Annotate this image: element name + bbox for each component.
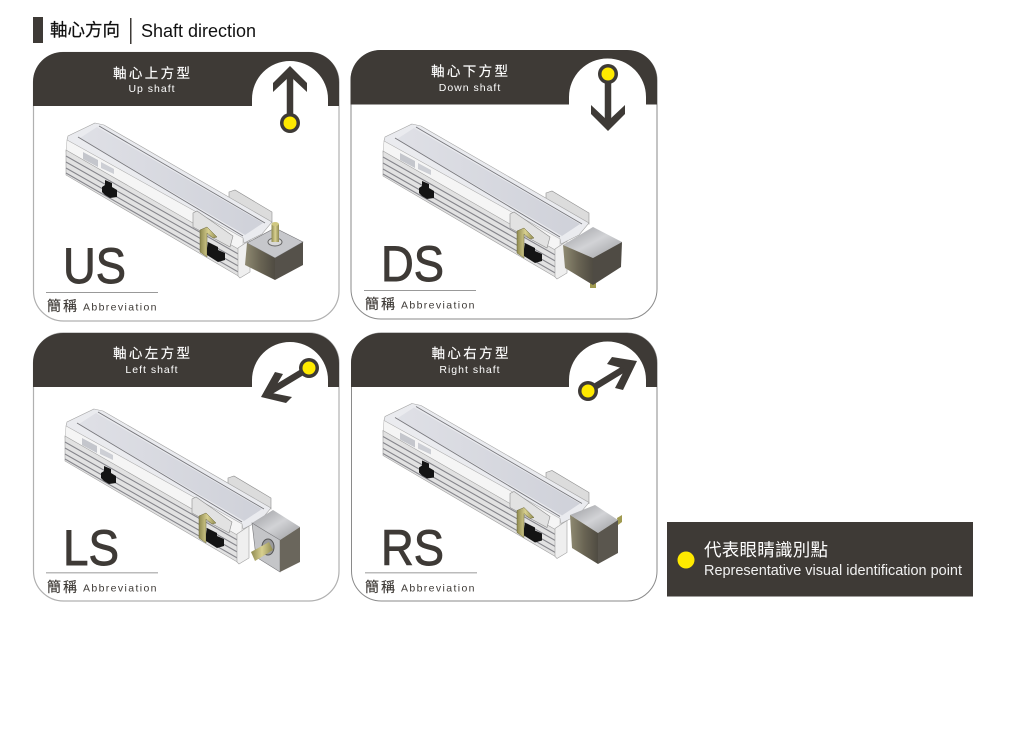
header text — [432, 346, 508, 376]
abbreviation: RS: 簡稱 — [365, 579, 395, 595]
panel: Right shaft — [351, 333, 657, 601]
heading English: Shaft direction — [141, 21, 256, 41]
panel: Down shaft — [350, 50, 657, 319]
header text: 軸心左方型 — [113, 346, 190, 361]
panel: Up shaft — [33, 52, 339, 321]
icon: up arrow with yellow point — [273, 66, 307, 133]
legend: visual identification point — [667, 522, 973, 596]
abbreviation: DS: Abbreviation — [401, 300, 475, 312]
abbreviation: LS: 簡稱 — [47, 579, 77, 595]
panel header — [350, 50, 657, 104]
icon: yellow point — [678, 552, 694, 568]
actuator with downward motor shaft — [383, 124, 622, 288]
panel header — [351, 333, 657, 387]
abbreviation: LS: Abbreviation — [83, 582, 157, 594]
panel: Left shaft — [33, 333, 339, 601]
header text: 軸心下方型 — [431, 64, 508, 79]
heading marker — [33, 17, 43, 43]
abbreviation: RS: Abbreviation — [401, 582, 475, 594]
legend Chinese label: 代表眼睛識別點 — [704, 540, 828, 560]
actuator with rightward motor shaft — [383, 404, 622, 564]
legend English label: Representative visual identification point — [704, 563, 962, 579]
abbreviation: US: US — [63, 238, 126, 294]
header text — [113, 66, 190, 95]
header text: Left shaft — [125, 364, 179, 376]
header text: 軸心右方型 — [432, 346, 508, 361]
abbreviation: DS: 簡稱 — [365, 296, 395, 312]
panel header — [33, 52, 339, 106]
icon: down arrow with yellow point — [591, 64, 625, 131]
header text: Up shaft — [128, 83, 176, 95]
abbreviation: US: 簡稱 — [47, 298, 77, 314]
actuator with upward motor shaft — [66, 123, 303, 280]
abbreviation: LS — [46, 520, 158, 595]
panel header — [33, 333, 339, 387]
icon: right arrow with yellow point — [578, 357, 637, 401]
page heading — [33, 17, 256, 44]
abbreviation: US: Abbreviation — [83, 302, 157, 314]
header text — [113, 346, 190, 376]
header text: 軸心上方型 — [113, 66, 190, 81]
header text: Right shaft — [439, 364, 501, 376]
actuator with leftward motor shaft — [65, 409, 300, 572]
icon: left arrow with yellow point — [261, 358, 319, 403]
header text — [431, 64, 508, 94]
abbreviation: LS: LS — [63, 520, 119, 576]
abbreviation: RS: RS — [381, 520, 444, 576]
header text: Down shaft — [439, 82, 501, 94]
abbreviation: US — [46, 238, 158, 314]
abbreviation: RS — [365, 520, 477, 595]
heading Chinese: 軸心方向 — [50, 20, 120, 40]
abbreviation: DS: DS — [381, 236, 444, 292]
abbreviation: DS — [364, 236, 476, 312]
